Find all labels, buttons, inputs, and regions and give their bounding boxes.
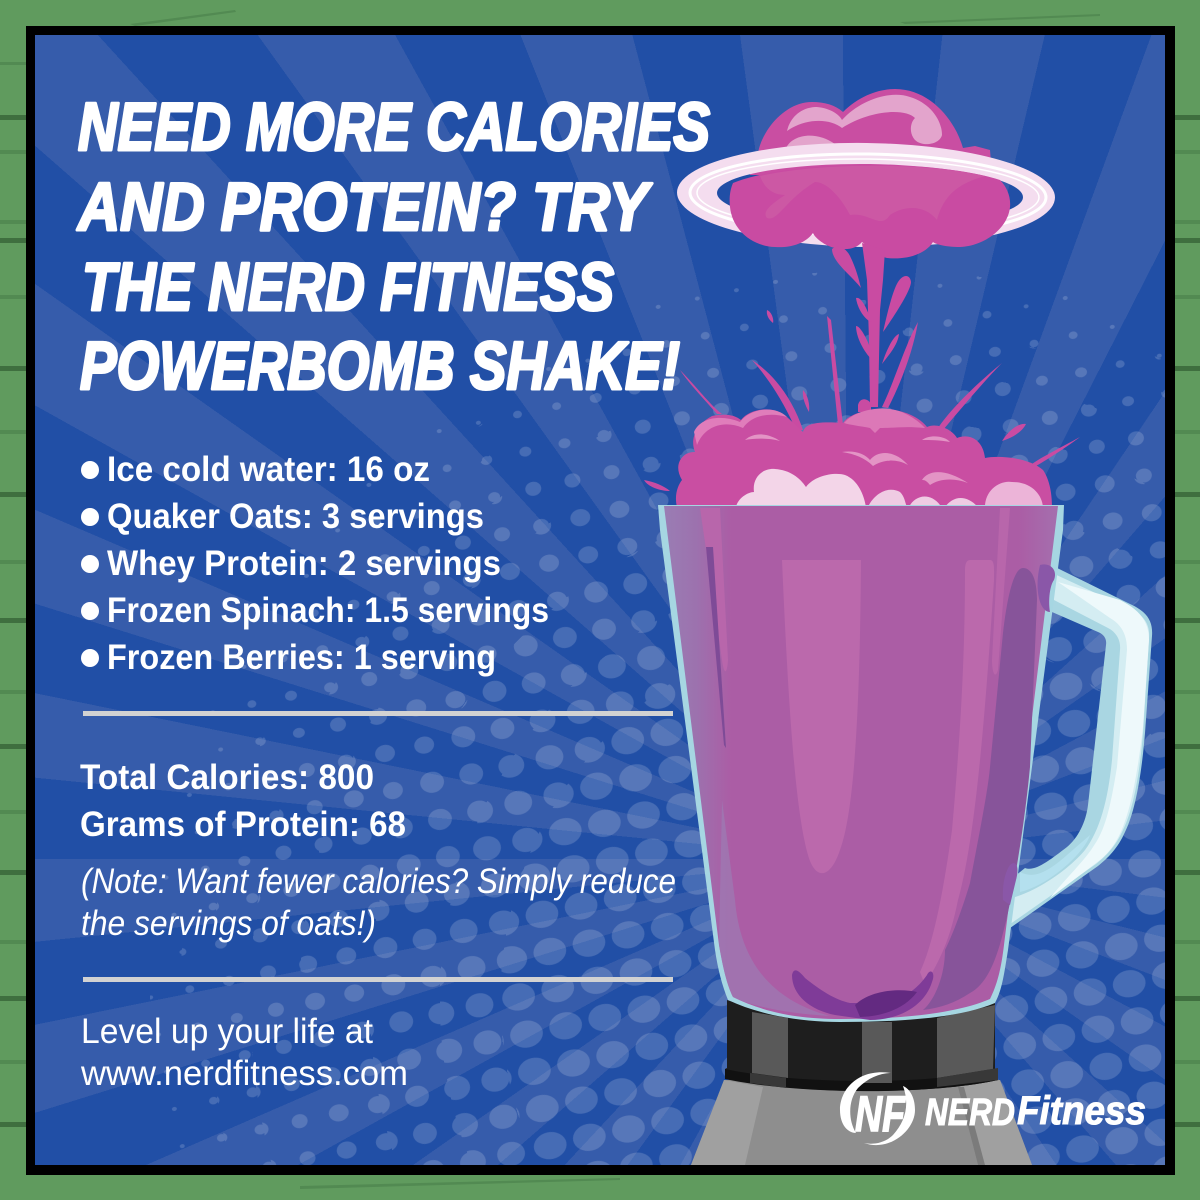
explosion: foam spilling out of blender [676, 409, 1052, 507]
note: the servings of oats!) [81, 904, 376, 943]
saturn ring [676, 140, 1056, 250]
cloud stem [862, 243, 885, 407]
handle mounts [1038, 564, 1055, 612]
explosion: upper mushroom cloud with ring [644, 89, 1080, 491]
blender jar [658, 505, 1064, 1022]
blender handle [1003, 562, 1152, 933]
ingredient: spinach: Frozen Spinach: 1.5 servings [107, 591, 549, 630]
call to action [80, 1012, 408, 1093]
jar highlights [700, 508, 1010, 675]
nutrition totals: Grams of Protein: 68 [80, 805, 406, 844]
logo wordmark: Fitness: Fitness [1017, 1089, 1146, 1133]
logo wordmark: Nerd: NERD [925, 1092, 1015, 1134]
logo mark: NF [855, 1086, 906, 1142]
cloud dome [750, 89, 992, 175]
ingredient: oats: Quaker Oats: 3 servings [107, 497, 484, 536]
jar lower left shade [719, 800, 830, 1016]
nutrition totals [80, 758, 406, 844]
halftone dots [150, 272, 1165, 1165]
title: THE NERD FITNESS [82, 249, 614, 325]
ingredient list [81, 450, 549, 677]
title: NEED MORE CALORIES [78, 89, 710, 165]
ingredient: water: Ice cold water: 16 oz [107, 450, 430, 489]
pink foam [676, 409, 1052, 507]
note [81, 862, 676, 943]
ingredient: whey: Whey Protein: 2 servings [107, 544, 501, 583]
splashes [644, 247, 1080, 491]
note: (Note: Want fewer calories? Simply reduce [81, 862, 676, 901]
blender base [691, 1080, 1032, 1165]
lower cloud [730, 165, 1010, 258]
nutrition totals: Total Calories: 800 [80, 758, 374, 797]
ingredient: berries: Frozen Berries: 1 serving [107, 638, 496, 677]
title [76, 89, 710, 404]
jar shadow [923, 568, 1037, 1010]
call to action: www.nerdfitness.com [80, 1054, 408, 1093]
blender [658, 505, 1152, 1165]
title: POWERBOMB SHAKE! [80, 328, 680, 404]
title: AND PROTEIN? TRY [76, 169, 653, 245]
blender collar [725, 1000, 998, 1091]
cream foam highlights [736, 469, 866, 507]
call to action: Level up your life at [81, 1012, 373, 1051]
blade [792, 970, 933, 1020]
logo mark [840, 1072, 915, 1145]
logo: Nerd Fitness [840, 1072, 1015, 1145]
